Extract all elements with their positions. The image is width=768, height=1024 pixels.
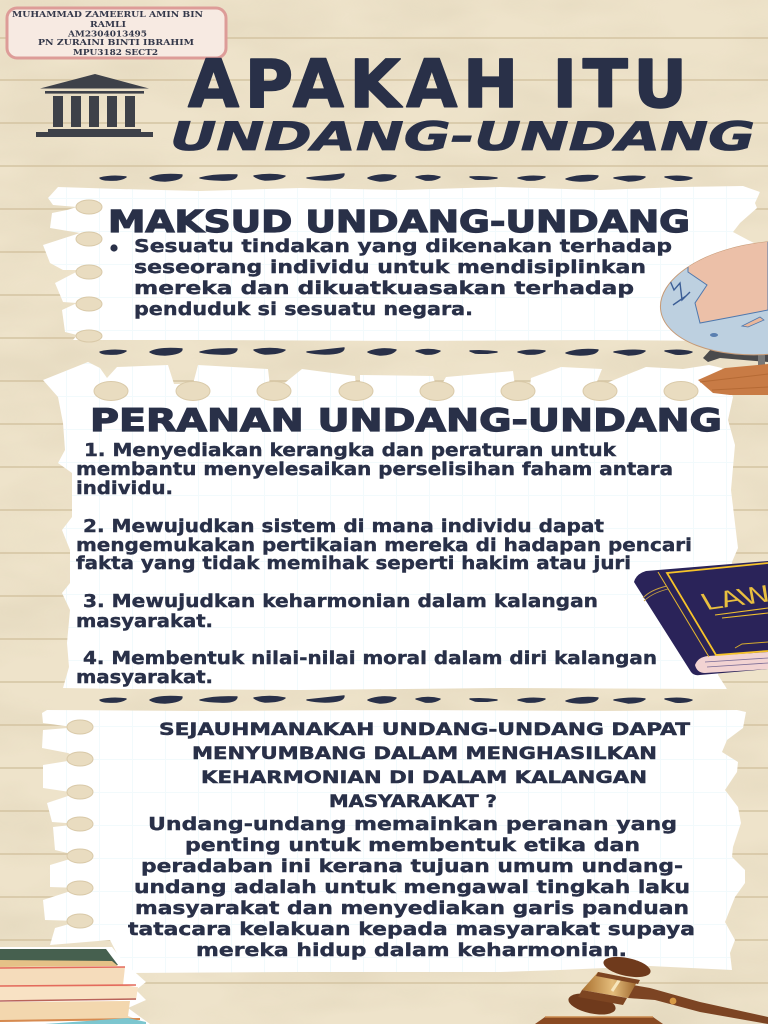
list item 1: individu. <box>76 478 173 499</box>
question heading: MASYARAKAT ? <box>329 792 497 812</box>
icon: law book: LAW <box>696 581 768 615</box>
panel: sejauhmanakah <box>42 710 746 973</box>
student info box: RAMLI <box>90 20 126 30</box>
icon: law book <box>634 561 768 675</box>
list item 2: fakta yang tidak memihak seperti hakim atau juri <box>76 553 631 574</box>
list item 2 <box>76 516 692 574</box>
question heading <box>159 720 691 812</box>
hole punches <box>94 382 698 400</box>
panel: peranan undang-undang <box>43 362 738 690</box>
list item 2: 2. Mewujudkan sistem di mana individu dapat <box>83 516 604 537</box>
answer paragraph: masyarakat dan menyediakan garis panduan <box>135 898 689 919</box>
list item 1: 1. Menyediakan kerangka dan peraturan untuk <box>84 440 617 461</box>
list item 4 <box>76 648 657 688</box>
list item 1: membantu menyelesaikan perselisihan faham antara <box>76 459 673 480</box>
heading: peranan: PERANAN UNDANG-UNDANG <box>90 403 722 439</box>
list item 1 <box>76 440 673 499</box>
answer paragraph: mereka hidup dalam keharmonian. <box>196 940 627 961</box>
answer paragraph <box>128 814 695 961</box>
student info box: MPU3182 SECT2 <box>73 48 158 58</box>
bullet definition <box>110 236 672 320</box>
title: UNDANG-UNDANG <box>170 115 755 160</box>
list item 4: masyarakat. <box>76 667 213 688</box>
bullet definition: Sesuatu tindakan yang dikenakan terhadap <box>134 236 672 257</box>
bullet definition: penduduk si sesuatu negara. <box>134 299 473 320</box>
answer paragraph: undang adalah untuk mengawal tingkah laku <box>134 877 690 898</box>
question heading: KEHARMONIAN DI DALAM KALANGAN <box>201 768 647 788</box>
icon: globe <box>660 241 768 395</box>
student info box: PN ZURAINI BINTI IBRAHIM <box>38 38 195 48</box>
panel: maksud undang-undang <box>43 186 768 342</box>
list item 4: 4. Membentuk nilai-nilai moral dalam diri kalangan <box>83 648 657 669</box>
answer paragraph: tatacara kelakuan kepada masyarakat supaya <box>128 919 695 940</box>
title <box>170 46 755 160</box>
list item 2: mengemukakan pertikaian mereka di hadapan pencari <box>76 535 692 556</box>
divider dashes lower <box>100 696 692 703</box>
answer paragraph: penting untuk membentuk etika dan <box>185 835 640 856</box>
icon: courthouse <box>36 74 153 137</box>
bullet definition: seseorang individu untuk mendisiplinkan <box>134 257 646 278</box>
divider dashes top <box>100 174 692 181</box>
question heading: SEJAUHMANAKAH UNDANG-UNDANG DAPAT <box>159 720 691 740</box>
answer paragraph: peradaban ini kerana tujuan umum undang- <box>141 856 683 877</box>
bullet definition: mereka dan dikuatkuasakan terhadap <box>134 278 634 299</box>
list item 3 <box>76 591 598 632</box>
list item 3: masyarakat. <box>76 611 213 632</box>
heading: maksud: MAKSUD UNDANG-UNDANG <box>108 205 690 240</box>
list item 3: 3. Mewujudkan keharmonian dalam kalangan <box>83 591 598 612</box>
icon: stack of books <box>0 947 150 1024</box>
hole punches <box>76 200 102 342</box>
question heading: MENYUMBANG DALAM MENGHASILKAN <box>192 744 657 764</box>
student info box <box>7 8 226 58</box>
hole punches <box>67 720 93 928</box>
icon: gavel <box>535 953 768 1024</box>
divider dashes middle <box>100 348 692 355</box>
answer paragraph: Undang-undang memainkan peranan yang <box>148 814 677 835</box>
student info box: MUHAMMAD ZAMEERUL AMIN BIN <box>12 10 203 20</box>
student info box: AM2304013495 <box>67 30 147 40</box>
title: APAKAH ITU <box>188 46 687 123</box>
